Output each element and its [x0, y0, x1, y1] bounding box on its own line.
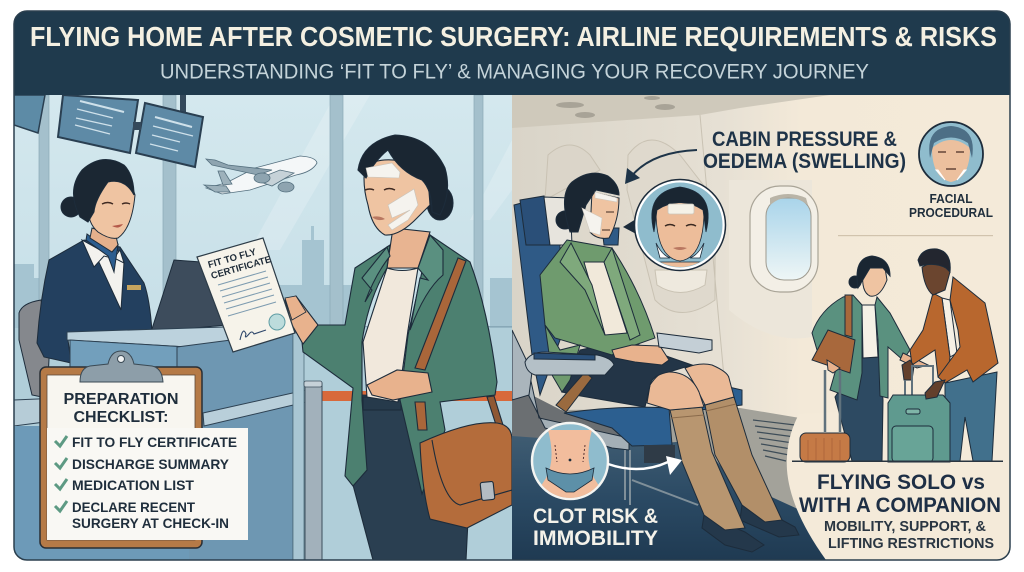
subtitle: UNDERSTANDING ‘FIT TO FLY’ & MANAGING YOUR RECOVERY JOURNEY: [160, 60, 869, 84]
label: cabin pressure: CABIN PRESSURE &: [712, 128, 897, 151]
panel: clipboard preparation checklist: [40, 351, 248, 548]
jacket: right side and arm: [400, 235, 497, 494]
thighs and knees: [685, 364, 734, 405]
label: flying solo vs companion: [799, 471, 1001, 552]
head: [427, 186, 453, 220]
figure: airline agent: [19, 160, 152, 398]
hands: [612, 345, 669, 365]
jacket: left side and arm: [302, 245, 390, 486]
label: flying solo vs companion: MOBILITY, SUPPORT, &: [824, 519, 987, 535]
checklist items: FIT TO FLY CERTIFICATE: [72, 434, 237, 450]
certificate: fit to fly: [197, 238, 306, 352]
icon: facial procedure circle: [919, 122, 983, 186]
header band: [14, 11, 1010, 95]
neck: [387, 228, 430, 268]
figure: male companion: [902, 249, 998, 461]
arrow: towards legs: [608, 456, 682, 475]
callout: facial close-up bubble: [623, 180, 726, 275]
label: facial procedural: FACIAL: [930, 191, 973, 206]
trousers: [353, 395, 470, 560]
panel: aircraft cabin scene: [512, 95, 1010, 560]
figure: seated traveller: [525, 173, 799, 552]
cream companion panel background: [787, 405, 1010, 560]
check marks: [55, 436, 67, 511]
checklist items: DISCHARGE SUMMARY: [72, 456, 230, 472]
shirt: [363, 268, 418, 402]
icon: abdominal procedure circle: [532, 423, 608, 500]
arrow: towards swollen face: [625, 150, 697, 184]
stanchion and rope: [304, 381, 512, 560]
figure: traveller with facial bandages: [285, 135, 512, 560]
window mullions: [39, 95, 483, 335]
wall panels and window shades: [544, 115, 724, 371]
label: facial procedural: [909, 191, 993, 220]
checklist heading: [64, 393, 178, 422]
checklist items: MEDICATION LIST: [72, 477, 194, 493]
air vent: [753, 420, 795, 461]
check-in counter: [14, 326, 306, 560]
armrests: [525, 352, 614, 375]
label: cabin pressure: [703, 128, 906, 173]
fingers over certificate: [285, 296, 306, 320]
label: facial procedural: PROCEDURAL: [909, 205, 993, 220]
label: cabin pressure: OEDEMA (SWELLING): [703, 150, 906, 173]
floor and lower wall: [561, 408, 798, 508]
icon: green suitcase: [888, 366, 950, 462]
shoes: [702, 515, 764, 552]
head: [556, 211, 574, 229]
certificate: fit to fly: FIT TO FLY: [207, 246, 258, 271]
stockings: [705, 397, 782, 522]
figure: traveller with luggage: [812, 256, 928, 461]
seat: [512, 196, 742, 505]
jacket: [540, 240, 655, 355]
checklist items: SURGERY AT CHECK-IN: [72, 515, 229, 531]
label: flying solo vs companion: WITH A COMPANION: [799, 494, 1001, 517]
skyline: [14, 226, 512, 338]
label: clot risk: [533, 505, 658, 550]
checklist heading: CHECKLIST:: [74, 409, 168, 426]
bag strap: [415, 258, 466, 370]
checklist items: [72, 434, 237, 531]
checklist heading: PREPARATION: [64, 391, 178, 408]
label: clot risk: CLOT RISK &: [533, 505, 658, 528]
icon: clipboard clip: [80, 351, 163, 382]
icon: airplane taking off: [204, 156, 317, 194]
icon: flight information screens: [14, 95, 203, 167]
icon: cabin window: [750, 186, 818, 292]
checklist items: DECLARE RECENT: [72, 499, 195, 515]
icon: orange suitcase: [800, 370, 850, 462]
panel: airport check-in scene: [14, 95, 512, 560]
hands: [285, 296, 318, 344]
certificate: fit to fly: CERTIFICATE: [210, 254, 273, 282]
overhead ceiling: [512, 95, 830, 128]
skirt: [562, 340, 692, 407]
label: flying solo vs companion: FLYING SOLO vs: [817, 471, 985, 494]
bag: [420, 423, 512, 528]
strap: [556, 372, 592, 412]
monitor on desk: [152, 260, 222, 329]
label: clot risk: IMMOBILITY: [533, 527, 658, 550]
label: flying solo vs companion: LIFTING RESTRICTIONS: [828, 536, 994, 552]
